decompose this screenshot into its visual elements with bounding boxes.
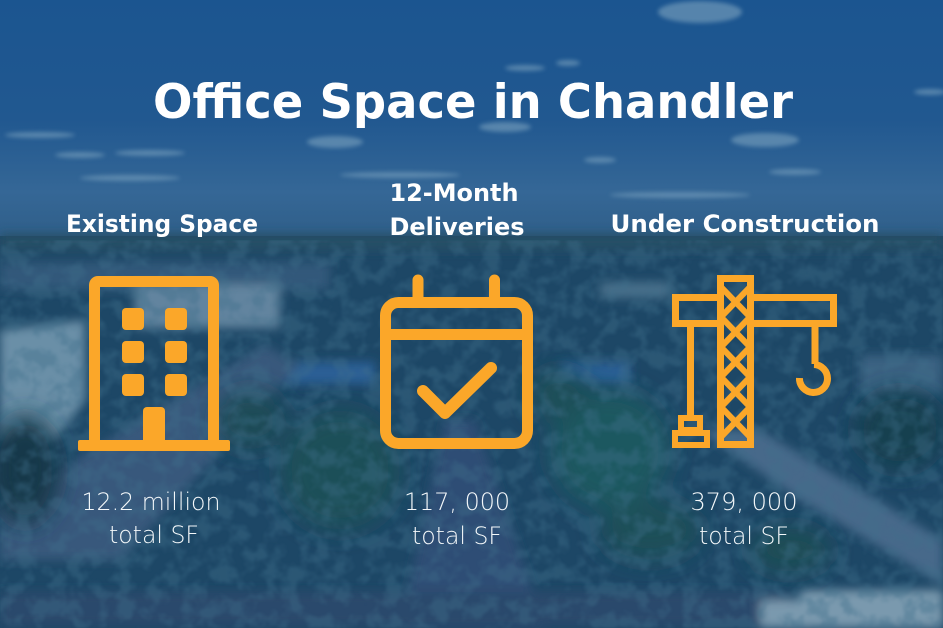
stat: 379,000 total SF xyxy=(690,488,798,550)
icon: office building xyxy=(78,276,230,451)
stat: 12.2 million total SF xyxy=(82,488,220,549)
column: 12-month deliveries xyxy=(386,179,528,550)
stat: 117,000 total SF: 117, 000 xyxy=(404,488,510,516)
title: Office Space in Chandler xyxy=(153,75,794,130)
stat: 379,000 total SF: 379, 000 xyxy=(690,488,798,516)
stat: 12.2 million total SF: total SF xyxy=(109,521,199,549)
heading: 12-month deliveries xyxy=(390,179,524,241)
stat: 117,000 total SF xyxy=(404,488,510,550)
heading: 12-month deliveries: Deliveries xyxy=(390,213,524,241)
column: under construction xyxy=(610,210,880,550)
heading: 12-month deliveries: 12-Month xyxy=(390,179,518,207)
heading: under construction: Under Construction xyxy=(610,210,880,238)
stat: 379,000 total SF: total SF xyxy=(699,522,789,550)
icon: calendar with check xyxy=(386,280,528,444)
stat: 12.2 million total SF: 12.2 million xyxy=(82,488,220,516)
heading: existing space: Existing Space xyxy=(66,210,258,238)
icon: tower crane xyxy=(675,278,834,445)
column: existing space xyxy=(66,210,258,549)
stat: 117,000 total SF: total SF xyxy=(412,522,502,550)
